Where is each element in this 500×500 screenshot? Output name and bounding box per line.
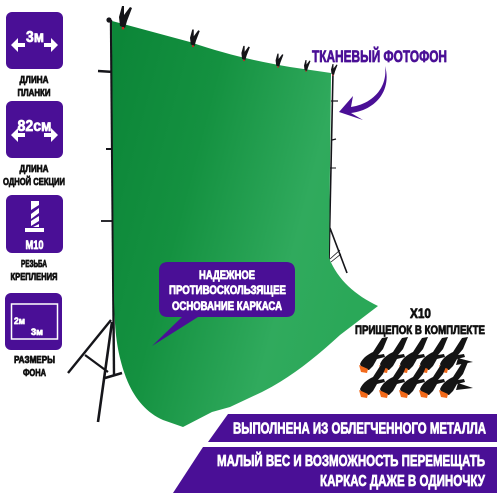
callout: non-slip base: ПРОТИВОСКОЛЬЗЯЩЕЕ <box>169 285 286 297</box>
icon card: backdrop size <box>5 293 62 350</box>
clips set: ten spring clamps <box>359 337 473 398</box>
right stand <box>329 72 347 273</box>
icon card: plank length <box>6 12 63 69</box>
banner: low weight and portability <box>173 447 497 493</box>
icon card: plank length: 3м <box>26 29 44 46</box>
caption: mount thread: КРЕПЛЕНИЯ <box>10 272 58 283</box>
heading: ten clips included: Х10 <box>410 305 431 321</box>
caption: section length: ОДНОЙ СЕКЦИИ <box>3 175 65 188</box>
heading: ten clips included <box>355 305 485 337</box>
heading: fabric backdrop: ТКАНЕВЫЙ ФОТОФОН <box>312 47 447 66</box>
caption: mount thread: РЕЗЬБА <box>21 259 47 270</box>
icon card: mount thread: М10 <box>26 238 44 252</box>
arrow: pointing to fabric <box>339 66 387 120</box>
caption: section length <box>3 164 65 188</box>
caption: backdrop size: РАЗМЕРЫ <box>14 355 55 366</box>
icon card: backdrop size: 2м <box>14 316 25 326</box>
fabric clips on top edge <box>119 6 338 76</box>
callout: non-slip base: НАДЕЖНОЕ <box>199 270 255 282</box>
caption: plank length <box>18 75 50 99</box>
icon card: backdrop size: 3м <box>31 327 43 337</box>
icon card: section length: 82см <box>18 118 52 135</box>
green fabric backdrop <box>112 21 378 427</box>
caption: backdrop size: ФОНА <box>23 368 46 379</box>
caption: plank length: ДЛИНА <box>20 75 48 86</box>
icon card: section length <box>6 101 63 158</box>
callout: non-slip base: ОСНОВАНИЕ КАРКАСА <box>172 301 282 313</box>
callout: non-slip base <box>152 262 295 346</box>
caption: backdrop size <box>14 355 55 379</box>
caption: plank length: ПЛАНКИ <box>18 88 50 99</box>
caption: mount thread <box>10 259 58 283</box>
caption: section length: ДЛИНА <box>20 164 48 175</box>
icon card: mount thread <box>6 195 63 253</box>
left stand <box>68 17 122 422</box>
banner: lightweight metal <box>208 414 497 442</box>
